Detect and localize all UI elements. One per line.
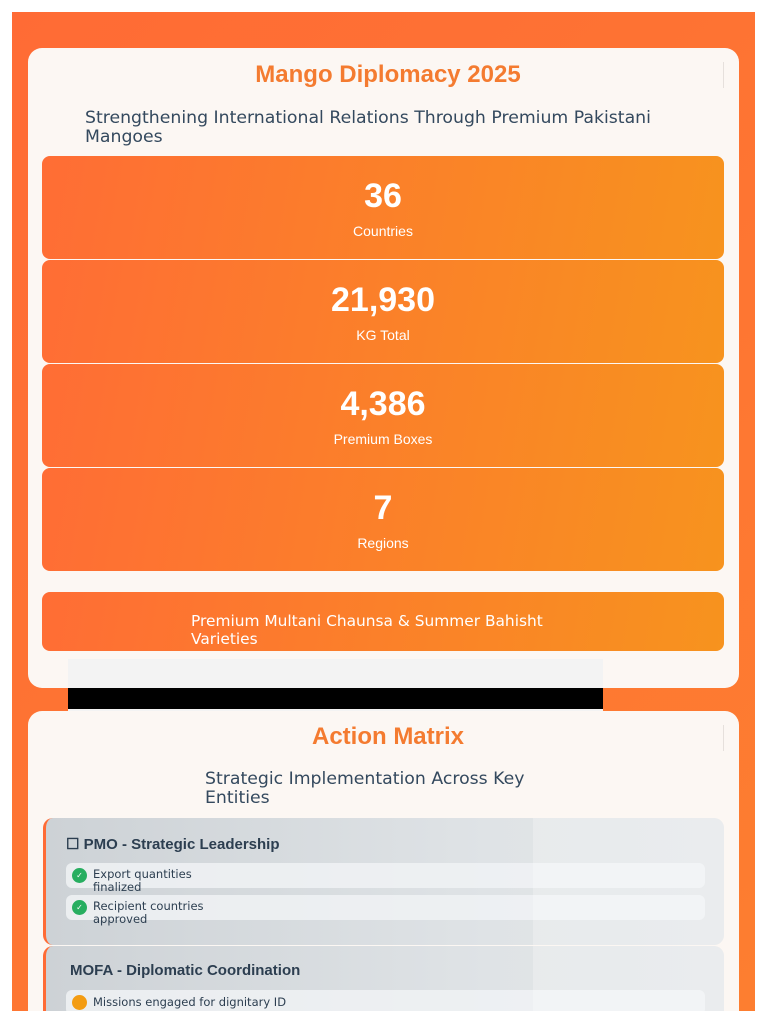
stat: kg bbox=[42, 260, 724, 363]
action matrix card bbox=[28, 711, 739, 1011]
entity: PMO bbox=[43, 818, 724, 945]
item: Export quantities bbox=[93, 867, 192, 881]
item: ✓ bbox=[76, 903, 83, 912]
varieties banner: Premium Multani Chaunsa & Summer Bahisht Varieties bbox=[191, 612, 543, 648]
entity: MOFA: MOFA - Diplomatic Coordination bbox=[70, 962, 300, 979]
black bar bbox=[68, 688, 603, 709]
title: Action Matrix bbox=[312, 723, 464, 750]
stat: countries bbox=[42, 156, 724, 259]
entity: MOFA bbox=[43, 946, 724, 1024]
varieties banner bbox=[42, 592, 724, 651]
stat: boxes bbox=[42, 364, 724, 467]
item: Recipient countries bbox=[93, 899, 204, 913]
item bbox=[66, 895, 705, 920]
item bbox=[66, 990, 705, 1015]
item bbox=[66, 863, 705, 888]
grey strip bbox=[68, 659, 603, 720]
stat: boxes: 4,386 bbox=[340, 385, 426, 423]
stat: kg: 21,930 bbox=[331, 281, 435, 319]
stat: countries: 36 bbox=[364, 177, 402, 215]
item: finalized bbox=[93, 880, 141, 894]
stat: boxes: Premium Boxes bbox=[334, 431, 432, 447]
entity: PMO: ☐ PMO - Strategic Leadership bbox=[66, 836, 280, 853]
stat: regions bbox=[42, 468, 724, 571]
item: ✓ bbox=[76, 871, 83, 880]
stat: regions: Regions bbox=[357, 535, 409, 551]
subtitle: Strategic Implementation Across Key Entities bbox=[205, 769, 524, 808]
item: Missions engaged for dignitary ID bbox=[93, 995, 286, 1009]
stat: kg: KG Total bbox=[356, 327, 410, 343]
divider mark bbox=[723, 62, 724, 88]
top card bbox=[28, 48, 739, 688]
subtitle: Strengthening International Relations Through Premium Pakistani Mangoes bbox=[85, 108, 651, 147]
stat: regions: 7 bbox=[374, 489, 392, 527]
stat: countries: Countries bbox=[353, 223, 413, 239]
title: Mango Diplomacy 2025 bbox=[255, 61, 521, 88]
item: approved bbox=[93, 912, 147, 926]
